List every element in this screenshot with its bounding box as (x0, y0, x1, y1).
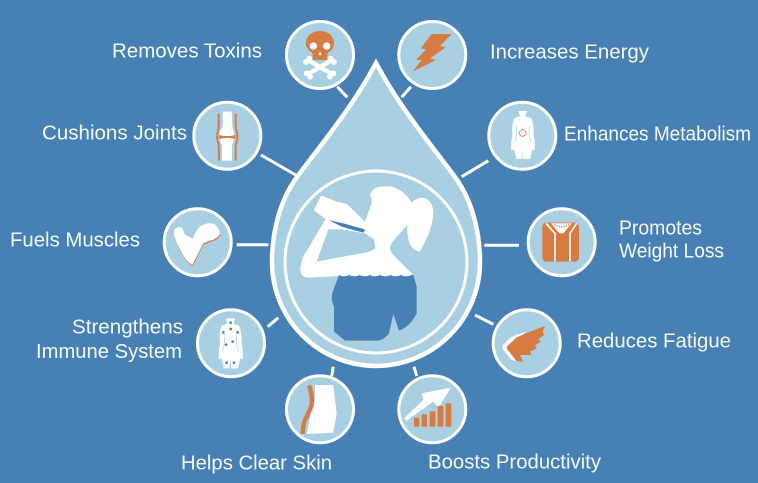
icon: clear skin (286, 376, 354, 443)
label: Strengthens Immune System (36, 316, 183, 363)
label: Fuels Muscles: Fuels Muscles (10, 228, 140, 252)
icon: body with immune dots (198, 310, 264, 377)
label: Cushions Joints: Cushions Joints (42, 122, 187, 144)
label: Boosts Productivity: Boosts Productivity (428, 450, 602, 474)
label: Promotes Weight Loss (619, 216, 724, 262)
label: Strengthens Immune System: Immune System (36, 340, 182, 363)
water drop (272, 63, 480, 366)
icon: flexed muscle (164, 209, 231, 276)
label: Removes Toxins: Removes Toxins (112, 40, 262, 62)
icon: wing (493, 310, 560, 377)
woman drinking silhouette (300, 186, 433, 341)
icon: skull and crossbones (286, 22, 354, 88)
connector lines (237, 87, 519, 376)
label: Reduces Fatigue: Reduces Fatigue (577, 330, 731, 352)
icon: weighing scale (528, 209, 595, 276)
label: Promotes Weight Loss: Weight Loss (619, 240, 724, 262)
icon: body with metabolism ring (489, 102, 556, 169)
icon: knee joint (194, 102, 261, 169)
label: Increases Energy: Increases Energy (490, 40, 650, 64)
icon: productivity chart (399, 376, 466, 443)
label: Helps Clear Skin: Helps Clear Skin (181, 452, 332, 474)
label: Promotes Weight Loss: Promotes (619, 216, 702, 240)
icon: lightning bolt (399, 22, 466, 88)
label: Strengthens Immune System: Strengthens (72, 316, 183, 338)
